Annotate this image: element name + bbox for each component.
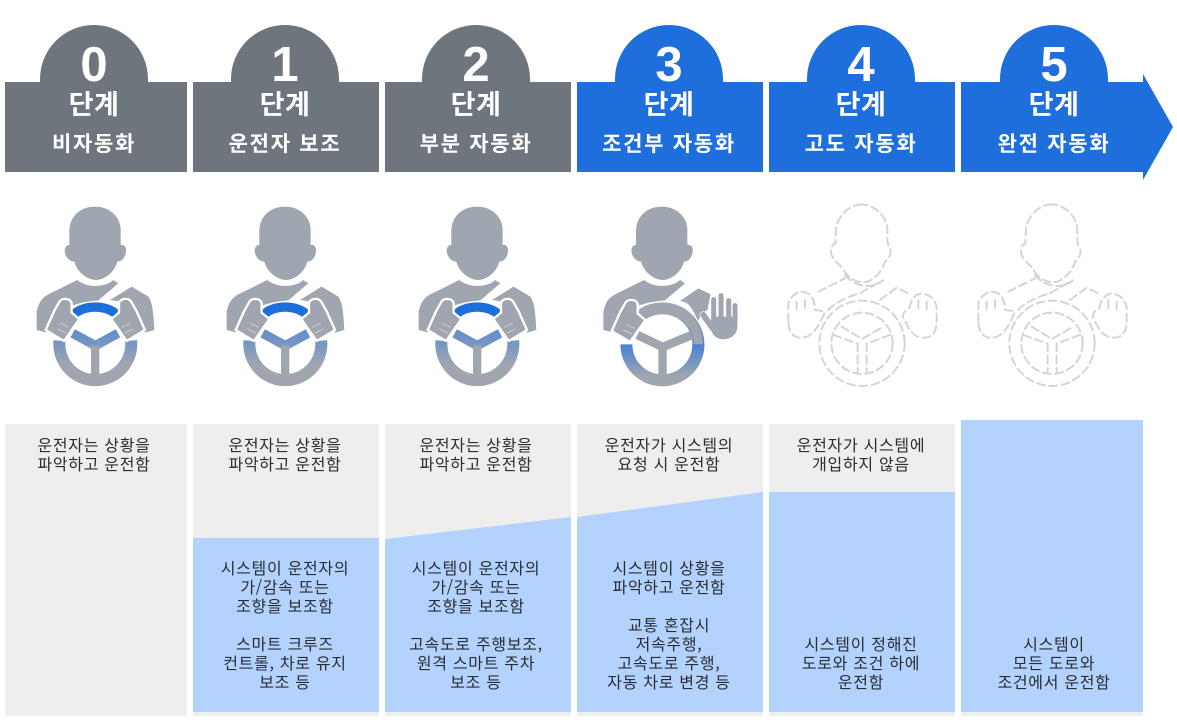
text: level 2 driver role — [419, 432, 533, 475]
header: level 2: 단계 — [451, 83, 501, 122]
icon: no driver level 4 — [788, 204, 937, 386]
header: level 1 — [193, 25, 379, 172]
text: level 1 driver role — [228, 432, 342, 475]
header: level 4: 단계 — [836, 83, 886, 122]
panel: level 5 — [961, 420, 1143, 716]
header: level 0: 0 — [80, 38, 108, 92]
text: level 2 system role — [409, 555, 543, 693]
text: level 5 system role: 모든 도로와 — [1013, 650, 1095, 674]
text: level 2 system role: 가/감속 또는 — [431, 574, 521, 598]
header: level 4 — [769, 25, 955, 172]
text: level 3 system role: 저속주행, — [636, 631, 702, 655]
text: level 1 driver role: 운전자는 상황을 — [228, 432, 342, 456]
text: level 1 driver role: 파악하고 운전함 — [228, 451, 342, 475]
header: level 4: 4 — [847, 38, 875, 92]
text: level 5 system role: 조건에서 운전함 — [997, 669, 1111, 693]
header: level 3: 단계 — [644, 83, 694, 122]
text: level 1 system role: 스마트 크루즈 — [236, 631, 334, 655]
text: level 5 system role — [997, 631, 1111, 693]
text: level 1 system role — [221, 555, 349, 693]
text: level 3 system role: 자동 차로 변경 등 — [607, 669, 731, 693]
header: level 5 arrow: 5 — [1040, 38, 1068, 92]
header: level 3 — [577, 25, 763, 172]
panel: level 2 — [385, 424, 571, 716]
header: level 3: 3 — [655, 38, 683, 92]
text: level 4 system role: 운전함 — [838, 669, 884, 693]
icon: driver level 2 — [419, 207, 536, 380]
text: level 3 driver role: 운전자가 시스템의 — [605, 432, 733, 456]
text: level 4 system role: 도로와 조건 하에 — [802, 650, 920, 674]
text: level 3 system role — [607, 555, 731, 693]
text: level 2 system role: 보조 등 — [450, 669, 502, 693]
text: level 3 driver role: 요청 시 운전함 — [618, 451, 720, 475]
text: level 4 system role: 시스템이 정해진 — [804, 631, 918, 655]
header: level 0 — [5, 25, 187, 172]
header: level 5 arrow: 완전 자동화 — [998, 128, 1110, 158]
text: level 0 driver role — [37, 432, 151, 475]
header: level 4: 고도 자동화 — [805, 128, 917, 158]
icon: driver level 1 — [227, 207, 344, 380]
text: level 3 system role: 파악하고 운전함 — [612, 574, 726, 598]
text: level 5 system role: 시스템이 — [1023, 631, 1085, 655]
text: level 2 system role: 조향을 보조함 — [427, 593, 525, 617]
header: level 2 — [385, 25, 571, 172]
text: level 1 system role: 가/감속 또는 — [240, 574, 330, 598]
text: level 3 system role: 시스템이 상황을 — [612, 555, 726, 579]
text: level 2 system role: 고속도로 주행보조, — [409, 631, 543, 655]
icon: no driver level 5 — [978, 204, 1127, 386]
header: level 5 arrow — [961, 25, 1173, 180]
text: level 1 system role: 조향을 보조함 — [236, 593, 334, 617]
panel: level 3 — [577, 424, 763, 716]
header: level 0: 비자동화 — [52, 128, 136, 158]
header: level 1: 단계 — [260, 83, 310, 122]
header: level 5 arrow: 단계 — [1029, 83, 1079, 122]
text: level 2 driver role: 파악하고 운전함 — [419, 451, 533, 475]
text: level 1 system role: 컨트롤, 차로 유지 — [223, 650, 347, 674]
panel: level 1 — [193, 424, 379, 716]
text: level 2 system role: 원격 스마트 주차 — [417, 650, 535, 674]
text: level 4 driver role: 개입하지 않음 — [812, 451, 910, 475]
text: level 4 system role — [802, 631, 920, 693]
icon: driver level 0 — [37, 207, 154, 380]
header: level 0: 단계 — [69, 83, 119, 122]
text: level 1 system role: 시스템이 운전자의 — [221, 555, 349, 579]
text: level 4 driver role: 운전자가 시스템에 — [797, 432, 925, 456]
text: level 0 driver role: 파악하고 운전함 — [37, 451, 151, 475]
text: level 3 system role: 교통 혼잡시 — [628, 612, 710, 636]
header: level 2: 2 — [462, 38, 490, 92]
header: level 1: 1 — [271, 38, 299, 92]
text: level 3 driver role — [605, 432, 733, 475]
header: level 3: 조건부 자동화 — [602, 128, 736, 158]
text: level 2 driver role: 운전자는 상황을 — [419, 432, 533, 456]
header: level 2: 부분 자동화 — [420, 128, 532, 158]
panel: level 4 — [769, 424, 955, 716]
text: level 4 driver role — [797, 432, 925, 475]
panel: level 0 — [5, 424, 187, 716]
text: level 2 system role: 시스템이 운전자의 — [412, 555, 540, 579]
text: level 1 system role: 보조 등 — [259, 669, 311, 693]
icon: driver level 3 with hand raised — [603, 207, 737, 395]
text: level 0 driver role: 운전자는 상황을 — [37, 432, 151, 456]
header: level 1: 운전자 보조 — [229, 128, 341, 158]
text: level 3 system role: 고속도로 주행, — [618, 650, 720, 674]
